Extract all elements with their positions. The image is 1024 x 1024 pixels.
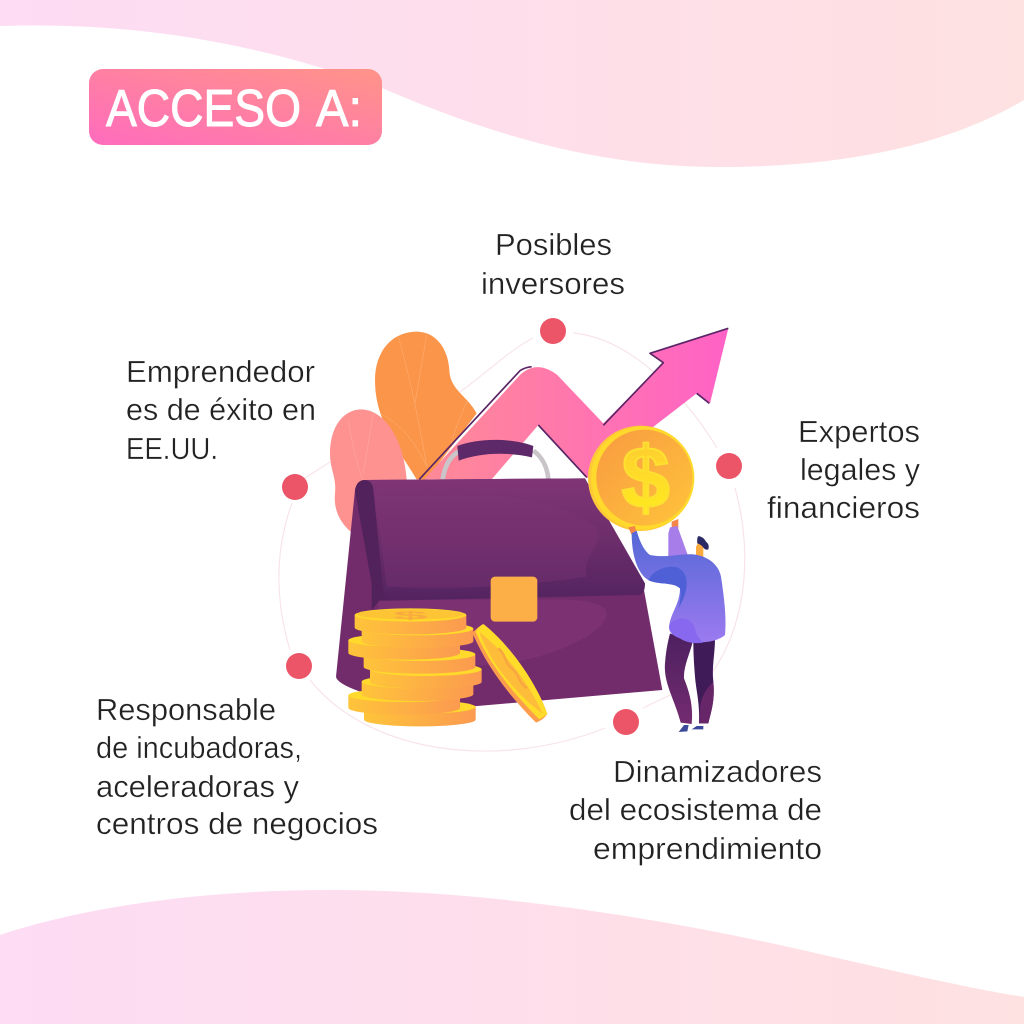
icon: orange leaf [375, 332, 477, 479]
text: responsable de incubadoras: Responsable [96, 692, 276, 727]
node dot: dinamizadores [613, 709, 639, 735]
title badge: ACCESO [106, 80, 301, 138]
top wave background [0, 0, 1024, 167]
person holding the coin [628, 519, 726, 732]
text: posibles inversores: inversores [481, 266, 625, 301]
icon: coin stack: $ [393, 609, 428, 621]
node dot: expertos [716, 453, 742, 479]
node dot: inversores [540, 318, 566, 344]
icon: leaning coin [472, 624, 547, 723]
text: expertos legales y financieros: financieros [767, 490, 920, 525]
icon: pink leaf [330, 409, 407, 534]
text: posibles inversores [481, 227, 625, 301]
text: responsable de incubadoras: centros de negocios [96, 806, 378, 841]
bottom wave background [0, 890, 1024, 1024]
illustration: briefcase, arrow, coins [330, 328, 728, 732]
text: expertos legales y financieros: Expertos [798, 414, 920, 449]
text: emprendedores de éxito: es de éxito en [126, 392, 316, 427]
node dot: emprendedores [282, 474, 308, 500]
text: expertos legales y financieros [767, 414, 920, 525]
text: responsable de incubadoras: de incubadoras, [96, 730, 302, 765]
text: responsable de incubadoras: aceleradoras y [96, 769, 299, 804]
text: dinamizadores del ecosistema: Dinamizadores [613, 754, 822, 789]
icon: briefcase [336, 478, 662, 707]
text: posibles inversores: Posibles [495, 227, 612, 262]
text: emprendedores de éxito: Emprendedor [126, 354, 315, 389]
text: dinamizadores del ecosistema: emprendimiento [593, 831, 822, 866]
text: dinamizadores del ecosistema: del ecosistema de [569, 792, 822, 827]
text: dinamizadores del ecosistema [569, 754, 822, 866]
text: emprendedores de éxito: EE.UU. [126, 431, 218, 466]
text: expertos legales y financieros: legales y [800, 452, 920, 487]
text: emprendedores de éxito [126, 354, 316, 466]
node dot: responsable [286, 653, 312, 679]
connecting ring [279, 333, 745, 751]
title badge: A: [316, 80, 362, 138]
text: responsable de incubadoras [96, 692, 378, 841]
title badge [89, 69, 382, 145]
icon: big dollar coin [588, 426, 694, 531]
icon: briefcase handle [443, 440, 548, 479]
icon: coin stack [348, 608, 547, 726]
icon: rising arrow [419, 328, 728, 479]
icon: big dollar coin: $ [621, 429, 670, 527]
